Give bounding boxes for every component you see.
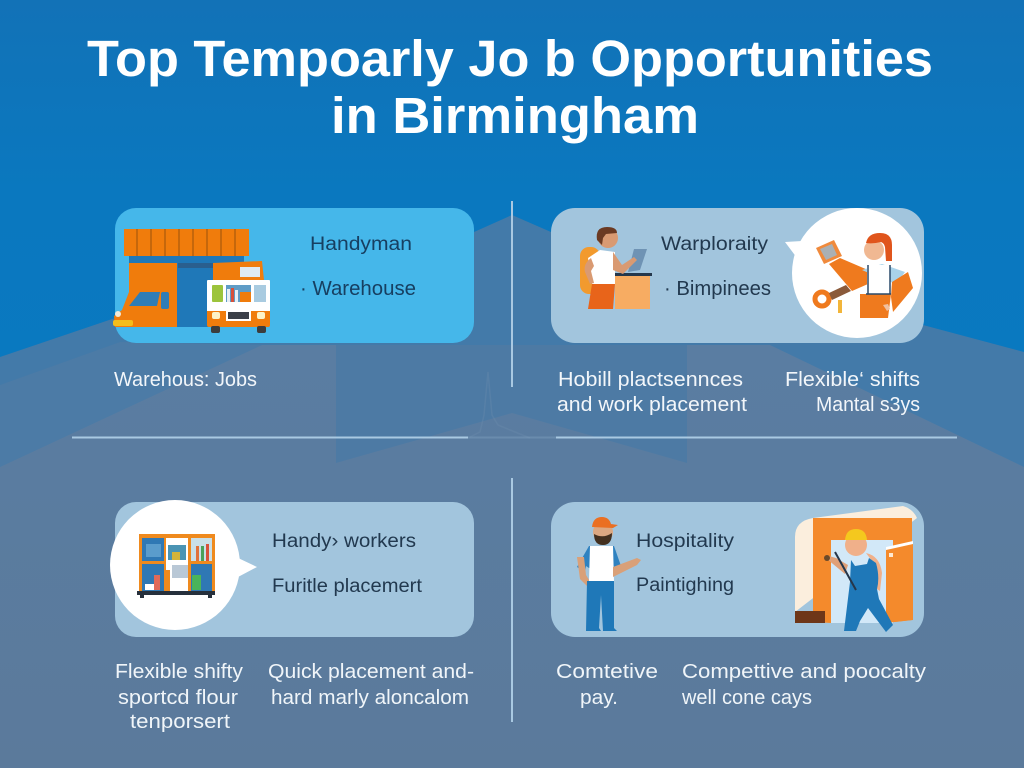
label: paintighing: Paintighing [636, 575, 734, 596]
caption: flexible shifty: tenporsert [130, 711, 230, 733]
caption: competitive pay: pay. [580, 687, 618, 709]
label: bimpinees: · Bimpinees [664, 278, 771, 300]
icon: warehouse and vans [113, 229, 270, 333]
panel: hospitality [551, 502, 924, 637]
caption: flexible shifts [785, 369, 920, 416]
label: warehouse: · Warehouse [300, 278, 416, 300]
caption: placements [557, 369, 747, 416]
caption: competitive pay [556, 661, 658, 709]
caption: flexible shifts: Flexible‘ shifts [785, 369, 920, 391]
label: furitle placement: Furitle placemert [272, 576, 423, 597]
caption: competitive and poocalty: well cone cays [681, 687, 812, 709]
caption: placements: Hobill plactsennces [558, 369, 743, 391]
dividers [72, 201, 957, 722]
label: handy workers: Handy› workers [272, 531, 416, 552]
icon: worker at orange door [795, 506, 917, 632]
caption: warehouse jobs: Warehous: Jobs [114, 369, 257, 391]
caption: flexible shifty [115, 661, 243, 733]
panel: warehouse [113, 208, 474, 343]
caption: flexible shifty: Flexible shifty [115, 661, 243, 683]
caption: quick placement: hard marly aloncalom [271, 687, 469, 709]
caption: competitive and poocalty [681, 661, 926, 709]
panel: handy workers [110, 500, 474, 637]
icon: worker at desk [580, 227, 652, 309]
icon: man with cap [577, 517, 641, 631]
icon: speech bubble with worker [785, 208, 922, 338]
caption: quick placement [268, 661, 474, 709]
caption: flexible shifty: sportcd flour [118, 687, 238, 709]
icon: speech bubble with bookshelf [110, 500, 257, 630]
title [87, 30, 933, 144]
caption: quick placement: Quick placement and- [268, 661, 474, 683]
caption: flexible shifts: Mantal s3ys [816, 394, 920, 416]
caption: placements: and work placement [557, 394, 747, 416]
label: hospitality: Hospitality [636, 531, 735, 552]
panel: temporary roles [551, 208, 924, 343]
caption: competitive pay: Comtetive [556, 661, 658, 683]
label: handyman: Handyman [310, 234, 412, 255]
title: Top Tempoarly Jo b Opportunities [87, 30, 933, 87]
title: in Birmingham [331, 87, 699, 144]
label: warplorality: Warploraity [661, 234, 769, 255]
caption: competitive and poocalty: Compettive and poocalty [682, 661, 926, 683]
